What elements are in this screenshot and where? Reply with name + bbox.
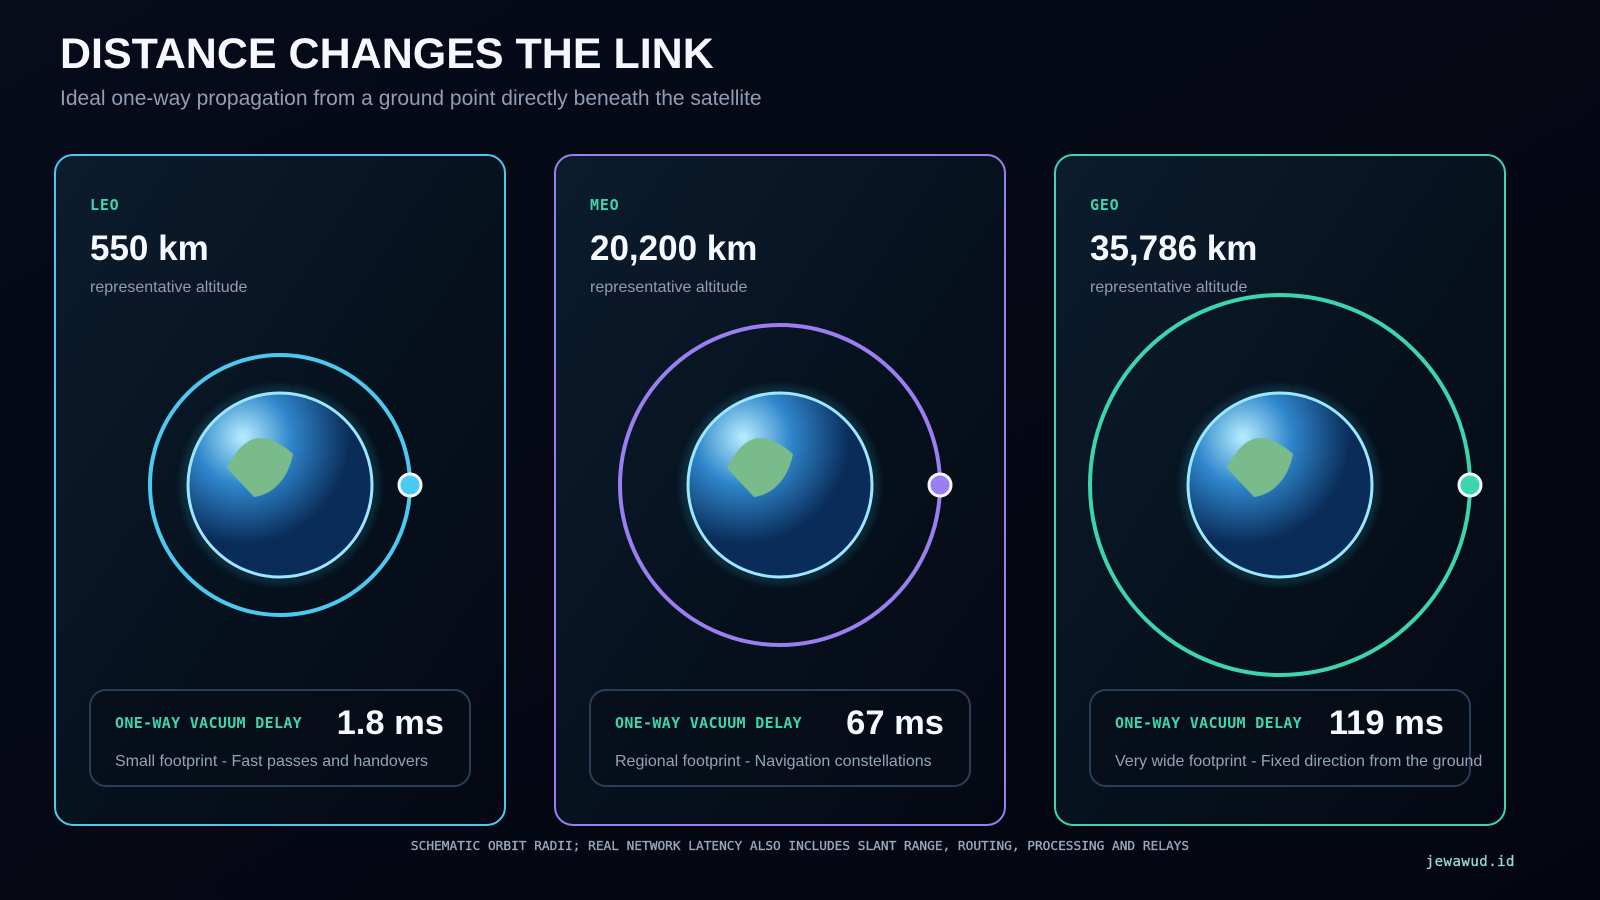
box frame <box>590 690 970 786</box>
delay value: 1.8 ms <box>337 704 444 742</box>
footnote: SCHEMATIC ORBIT RADII; REAL NETWORK LATENCY ALSO INCLUDES SLANT RANGE, ROUTING, PROCESSING AND RELAYS <box>411 839 1189 854</box>
earth landmass <box>227 438 293 497</box>
panel: MEO <box>555 155 1005 825</box>
MEO altitude: 20,200 km <box>590 229 757 268</box>
GEO delay box <box>1090 690 1482 786</box>
LEO delay box <box>90 690 470 786</box>
GEO satellite <box>1459 474 1481 496</box>
brand credit: jewawud.id <box>1426 854 1515 870</box>
delay note: Regional footprint - Navigation constellations <box>615 753 932 770</box>
LEO altitude: 550 km <box>90 229 209 268</box>
earth glow <box>180 385 380 585</box>
MEO card frame <box>555 155 1005 825</box>
box frame <box>90 690 470 786</box>
earth globe <box>1188 393 1372 577</box>
earth landmass <box>1227 438 1293 497</box>
MEO label: MEO <box>590 196 620 214</box>
delay label: ONE-WAY VACUUM DELAY <box>615 714 802 732</box>
panel: GEO <box>1055 155 1505 825</box>
delay label: ONE-WAY VACUUM DELAY <box>115 714 302 732</box>
delay note: Very wide footprint - Fixed direction from the ground <box>1115 753 1482 770</box>
title: DISTANCE CHANGES THE LINK <box>60 30 714 78</box>
GEO altitude: 35,786 km <box>1090 229 1257 268</box>
panel: LEO <box>55 155 505 825</box>
earth landmass <box>727 438 793 497</box>
LEO orbit diagram <box>150 355 421 615</box>
MEO delay box <box>590 690 970 786</box>
delay note: Small footprint - Fast passes and handovers <box>115 753 428 770</box>
delay label: ONE-WAY VACUUM DELAY <box>1115 714 1302 732</box>
LEO orbit ring <box>150 355 410 615</box>
LEO satellite <box>399 474 421 496</box>
LEO altitude caption: representative altitude <box>90 279 248 296</box>
earth glow <box>680 385 880 585</box>
earth glow <box>1180 385 1380 585</box>
GEO card frame <box>1055 155 1505 825</box>
LEO card frame <box>55 155 505 825</box>
MEO orbit diagram <box>620 325 951 645</box>
GEO altitude caption: representative altitude <box>1090 279 1248 296</box>
earth globe <box>688 393 872 577</box>
subtitle: Ideal one-way propagation from a ground point directly beneath the satellite <box>60 87 762 110</box>
delay value: 119 ms <box>1329 704 1444 742</box>
GEO orbit diagram <box>1090 295 1481 675</box>
MEO satellite <box>929 474 951 496</box>
GEO label: GEO <box>1090 196 1120 214</box>
box frame <box>1090 690 1470 786</box>
GEO orbit ring <box>1090 295 1470 675</box>
LEO label: LEO <box>90 196 120 214</box>
delay value: 67 ms <box>846 704 944 742</box>
MEO altitude caption: representative altitude <box>590 279 748 296</box>
earth globe <box>188 393 372 577</box>
MEO orbit ring <box>620 325 940 645</box>
